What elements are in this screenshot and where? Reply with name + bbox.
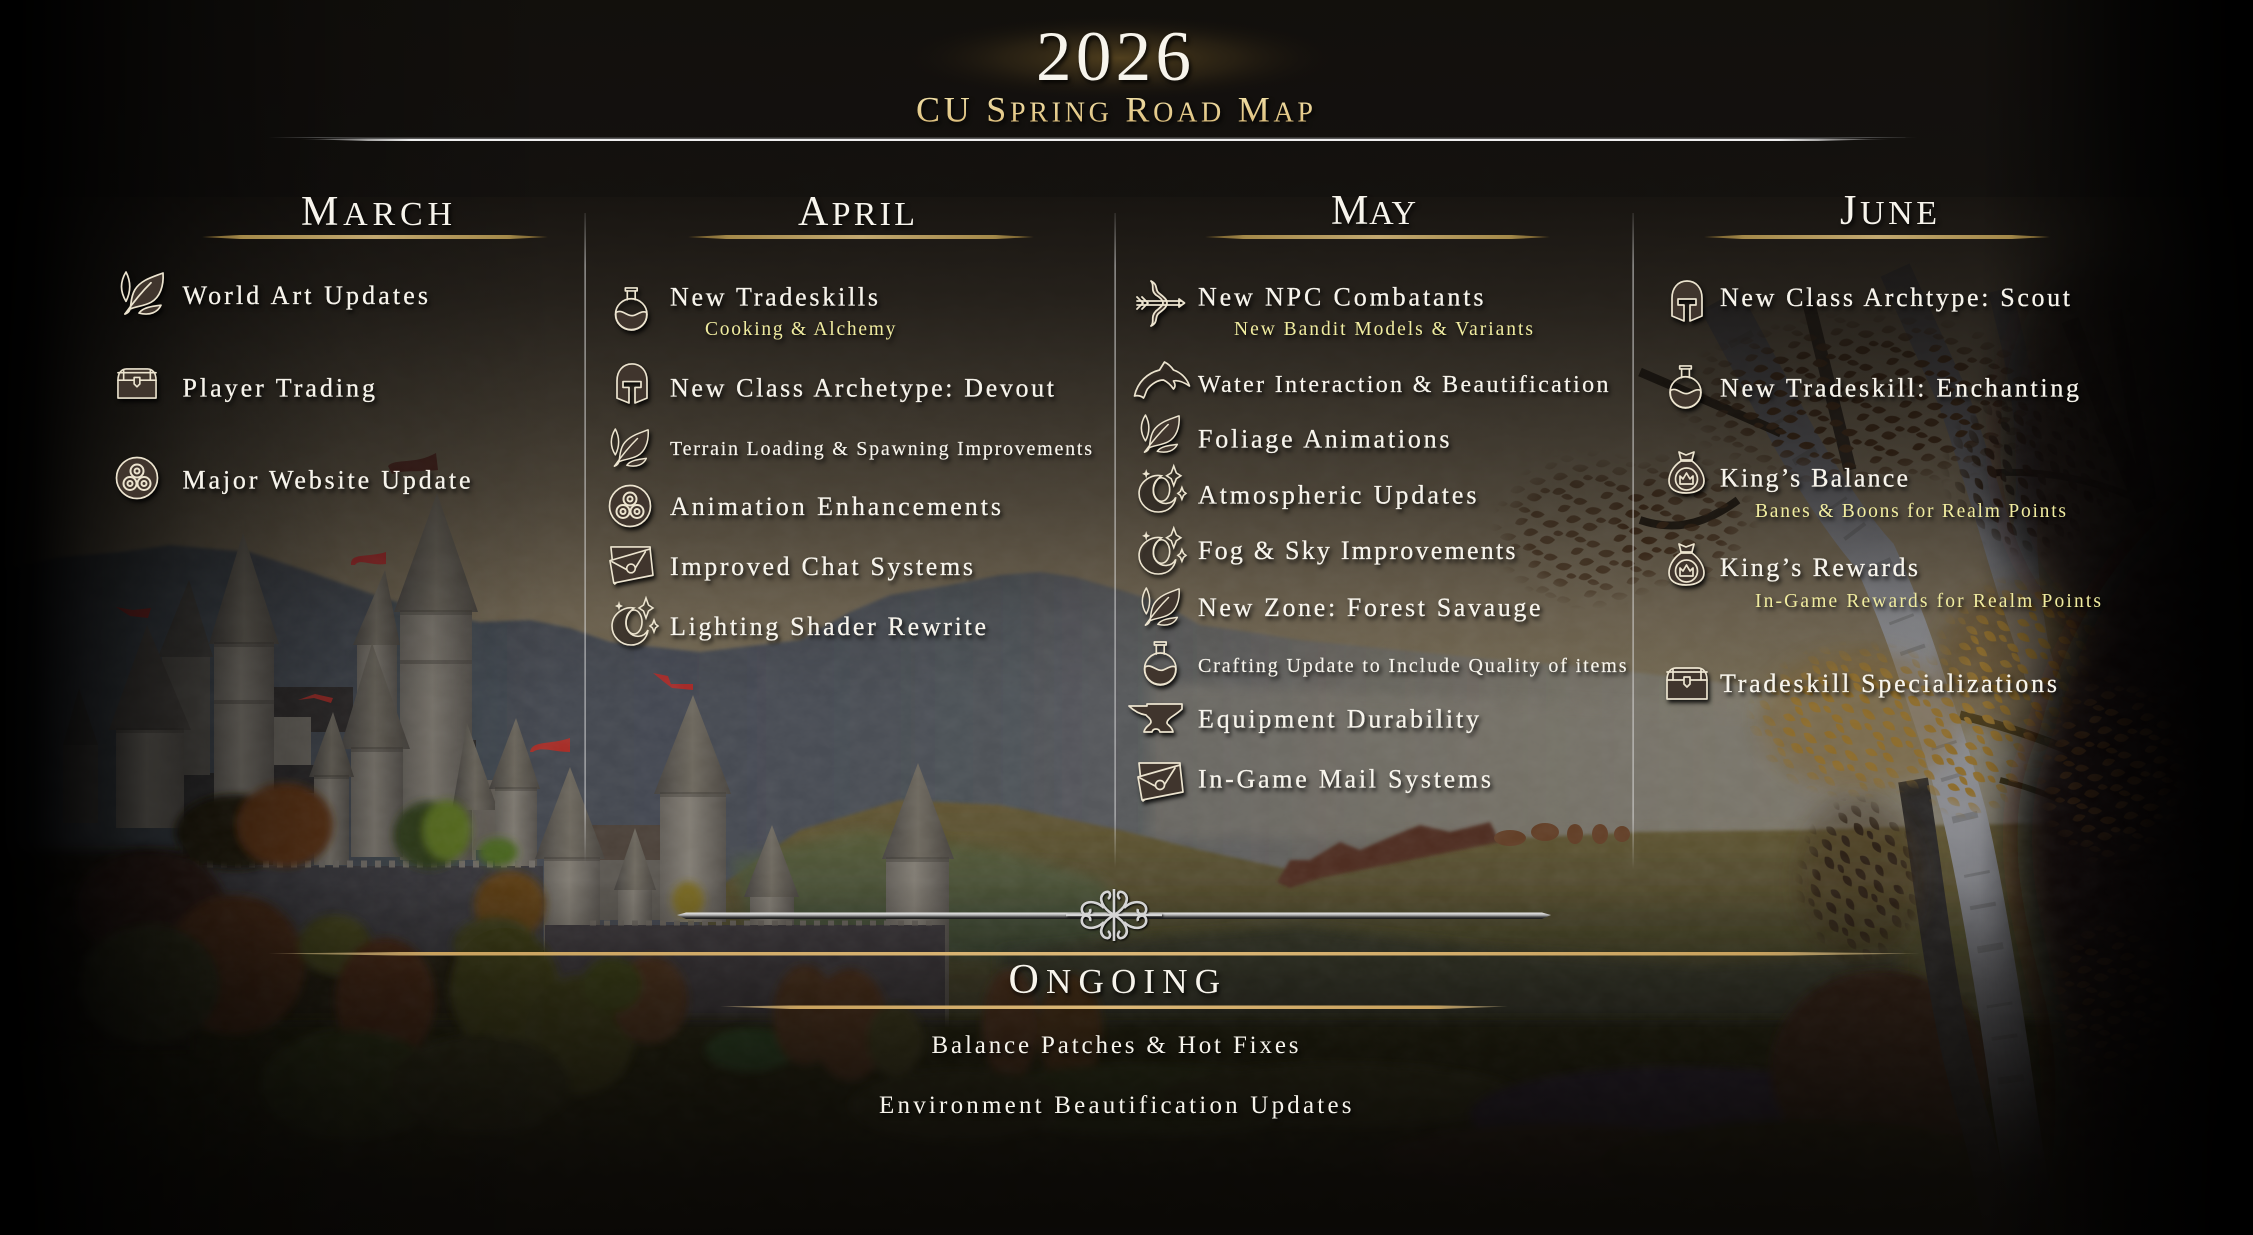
- icon: leaf: [1142, 588, 1179, 625]
- dark buildings: [266, 687, 353, 732]
- castle: [63, 453, 954, 1035]
- label: Water Interaction & Beautification: [1198, 372, 1608, 398]
- item: New NPC Combatants: [1137, 281, 1533, 340]
- heading bar: [202, 235, 548, 239]
- sub label: In-Game Rewards for Realm Points: [1755, 591, 2101, 612]
- dark hill belt: [1000, 925, 1900, 1120]
- trees near castle and foreground: [75, 783, 1520, 1141]
- forest underlay: [0, 950, 900, 1235]
- item: New Zone: Forest Savauge: [1142, 588, 1540, 625]
- item: New Tradeskills: [615, 282, 896, 340]
- distant mountains: [0, 545, 2253, 1000]
- icon: helmet: [617, 364, 647, 403]
- icon: flask: [1670, 366, 1701, 408]
- panel: March: [116, 189, 548, 498]
- tower battlement bands: [116, 610, 949, 862]
- header: [916, 18, 1313, 130]
- icon: helmet: [1672, 281, 1702, 321]
- panel: May: [1129, 188, 1627, 801]
- curtain walls: [175, 866, 543, 956]
- label: Major Website Update: [182, 466, 470, 494]
- label: Atmospheric Updates: [1198, 480, 1476, 510]
- title: 2026: 2026: [1036, 18, 1191, 96]
- panel: June: [1667, 188, 2101, 699]
- upper gold rule: [268, 952, 1920, 956]
- icon: moon: [1139, 466, 1186, 512]
- item: New Class Archtype: Scout: [1672, 281, 2071, 321]
- sub label: Cooking & Alchemy: [705, 319, 896, 340]
- label: New Zone: Forest Savauge: [1198, 593, 1540, 622]
- distant treeline: [1277, 822, 1500, 888]
- label: Terrain Loading & Spawning Improvements: [670, 438, 1092, 460]
- label: King’s Rewards: [1720, 553, 1918, 582]
- icon: leaf: [1141, 415, 1179, 452]
- item: Terrain Loading: [611, 429, 1092, 466]
- label: King’s Balance: [1720, 464, 1908, 492]
- grey mist band: [1150, 680, 1900, 840]
- heading: March: MARCH: [301, 189, 452, 235]
- icon: envelope: [610, 547, 653, 584]
- foliage: [1500, 328, 2076, 956]
- heading: April: APRIL: [798, 189, 915, 235]
- dark right tree mass: [2000, 250, 2220, 630]
- silver divider with ornament: [677, 889, 1551, 941]
- forest ground: [0, 1020, 2253, 1235]
- icon: leaf: [611, 429, 648, 466]
- item: Water Interaction: [1134, 362, 1608, 398]
- label: Animation Enhancements: [670, 492, 1001, 521]
- item: Foliage Animations: [1141, 415, 1450, 454]
- icon: moon: [612, 598, 658, 645]
- text: Environment Beautification: Environment Beautification Updates: [879, 1092, 1352, 1119]
- item: Animation Enhancements: [610, 486, 1001, 526]
- label: Tradeskill Specializations: [1720, 669, 2057, 698]
- heading bar: [1704, 235, 2050, 239]
- item: King's Rewards: [1669, 544, 2101, 612]
- item: Crafting Update: [1144, 642, 1627, 685]
- item: Major Website Update: [116, 458, 470, 498]
- right valley forest: [1380, 970, 2000, 1211]
- item: Fog & Sky Improvements: [1139, 528, 1516, 574]
- green hill: [730, 830, 1140, 960]
- item: In-Game Mail Systems: [1138, 763, 1491, 801]
- item: Tradeskill Specializations: [1667, 668, 2057, 699]
- gold hills: [700, 800, 2253, 1100]
- vignette overlays: [0, 0, 2253, 700]
- flags: [388, 453, 438, 474]
- icon: flask: [1144, 642, 1176, 685]
- label: World Art Updates: [182, 281, 428, 310]
- towers back to front: [63, 743, 98, 823]
- label: New Class Archtype: Scout: [1720, 283, 2071, 312]
- lower gold rule: [720, 1006, 1508, 1009]
- title glow: [905, 16, 1335, 100]
- label: Fog & Sky Improvements: [1198, 536, 1516, 565]
- icon: triskele: [116, 458, 158, 498]
- icon: dolphin: [1134, 362, 1190, 398]
- heading: Ongoing: ONGOING: [1008, 957, 1220, 1003]
- panel: Ongoing: [268, 952, 1920, 1119]
- label: In-Game Mail Systems: [1198, 764, 1491, 794]
- heading: June: JUNE: [1840, 188, 1937, 234]
- item: Player Trading: [118, 369, 375, 402]
- label: New NPC Combatants: [1198, 282, 1484, 312]
- icon: money bag: [1669, 544, 1704, 585]
- icon: anvil: [1129, 704, 1182, 732]
- label: New Tradeskill: Enchanting: [1720, 374, 2079, 402]
- heading: May: MAY: [1331, 188, 1416, 234]
- icon: bow: [1137, 281, 1184, 326]
- item: World Art Updates: [122, 272, 428, 314]
- panel: April: [610, 189, 1092, 645]
- text: Balance Patches: Balance Patches & Hot Fixes: [932, 1032, 1298, 1059]
- item: New Class Archetype: Devout: [617, 364, 1055, 403]
- item: Improved Chat Systems: [610, 547, 973, 584]
- heading bar: [688, 235, 1034, 239]
- sub label: New Bandit Models & Variants: [1234, 319, 1533, 340]
- label: Foliage Animations: [1198, 424, 1450, 454]
- heading bar: [1205, 235, 1550, 239]
- label: Improved Chat Systems: [670, 552, 973, 581]
- label: New Tradeskills: [670, 282, 878, 312]
- label: Crafting Update to Include Quality of items: [1198, 655, 1627, 677]
- header rule: [268, 137, 1918, 141]
- icon: chest: [118, 369, 156, 398]
- item: New Tradeskill: Enchanting: [1670, 366, 2079, 408]
- subtitle: CU SPRING ROAD MAP: [916, 90, 1313, 130]
- icon: envelope: [1138, 763, 1183, 801]
- label: Player Trading: [182, 374, 375, 402]
- column dividers: [584, 213, 1634, 869]
- item: Lighting Shader Rewrite: [612, 598, 986, 645]
- icon: flask: [615, 288, 647, 330]
- item: Atmospheric Updates: [1139, 466, 1476, 512]
- ornament: [1066, 889, 1162, 941]
- icon: money bag: [1669, 452, 1704, 493]
- item: King's Balance: [1669, 452, 2066, 522]
- label: Equipment Durability: [1198, 704, 1479, 734]
- icon: chest: [1667, 668, 1707, 699]
- item: Equipment Durability: [1129, 704, 1479, 734]
- label: Lighting Shader Rewrite: [670, 612, 986, 641]
- birch trunks: [1640, 270, 2150, 1235]
- sub label: Banes & Boons for Realm Points: [1755, 501, 2066, 522]
- icon: leaf: [122, 272, 163, 314]
- icon: triskele: [610, 486, 650, 526]
- icon: moon: [1139, 528, 1186, 574]
- label: New Class Archetype: Devout: [670, 374, 1055, 402]
